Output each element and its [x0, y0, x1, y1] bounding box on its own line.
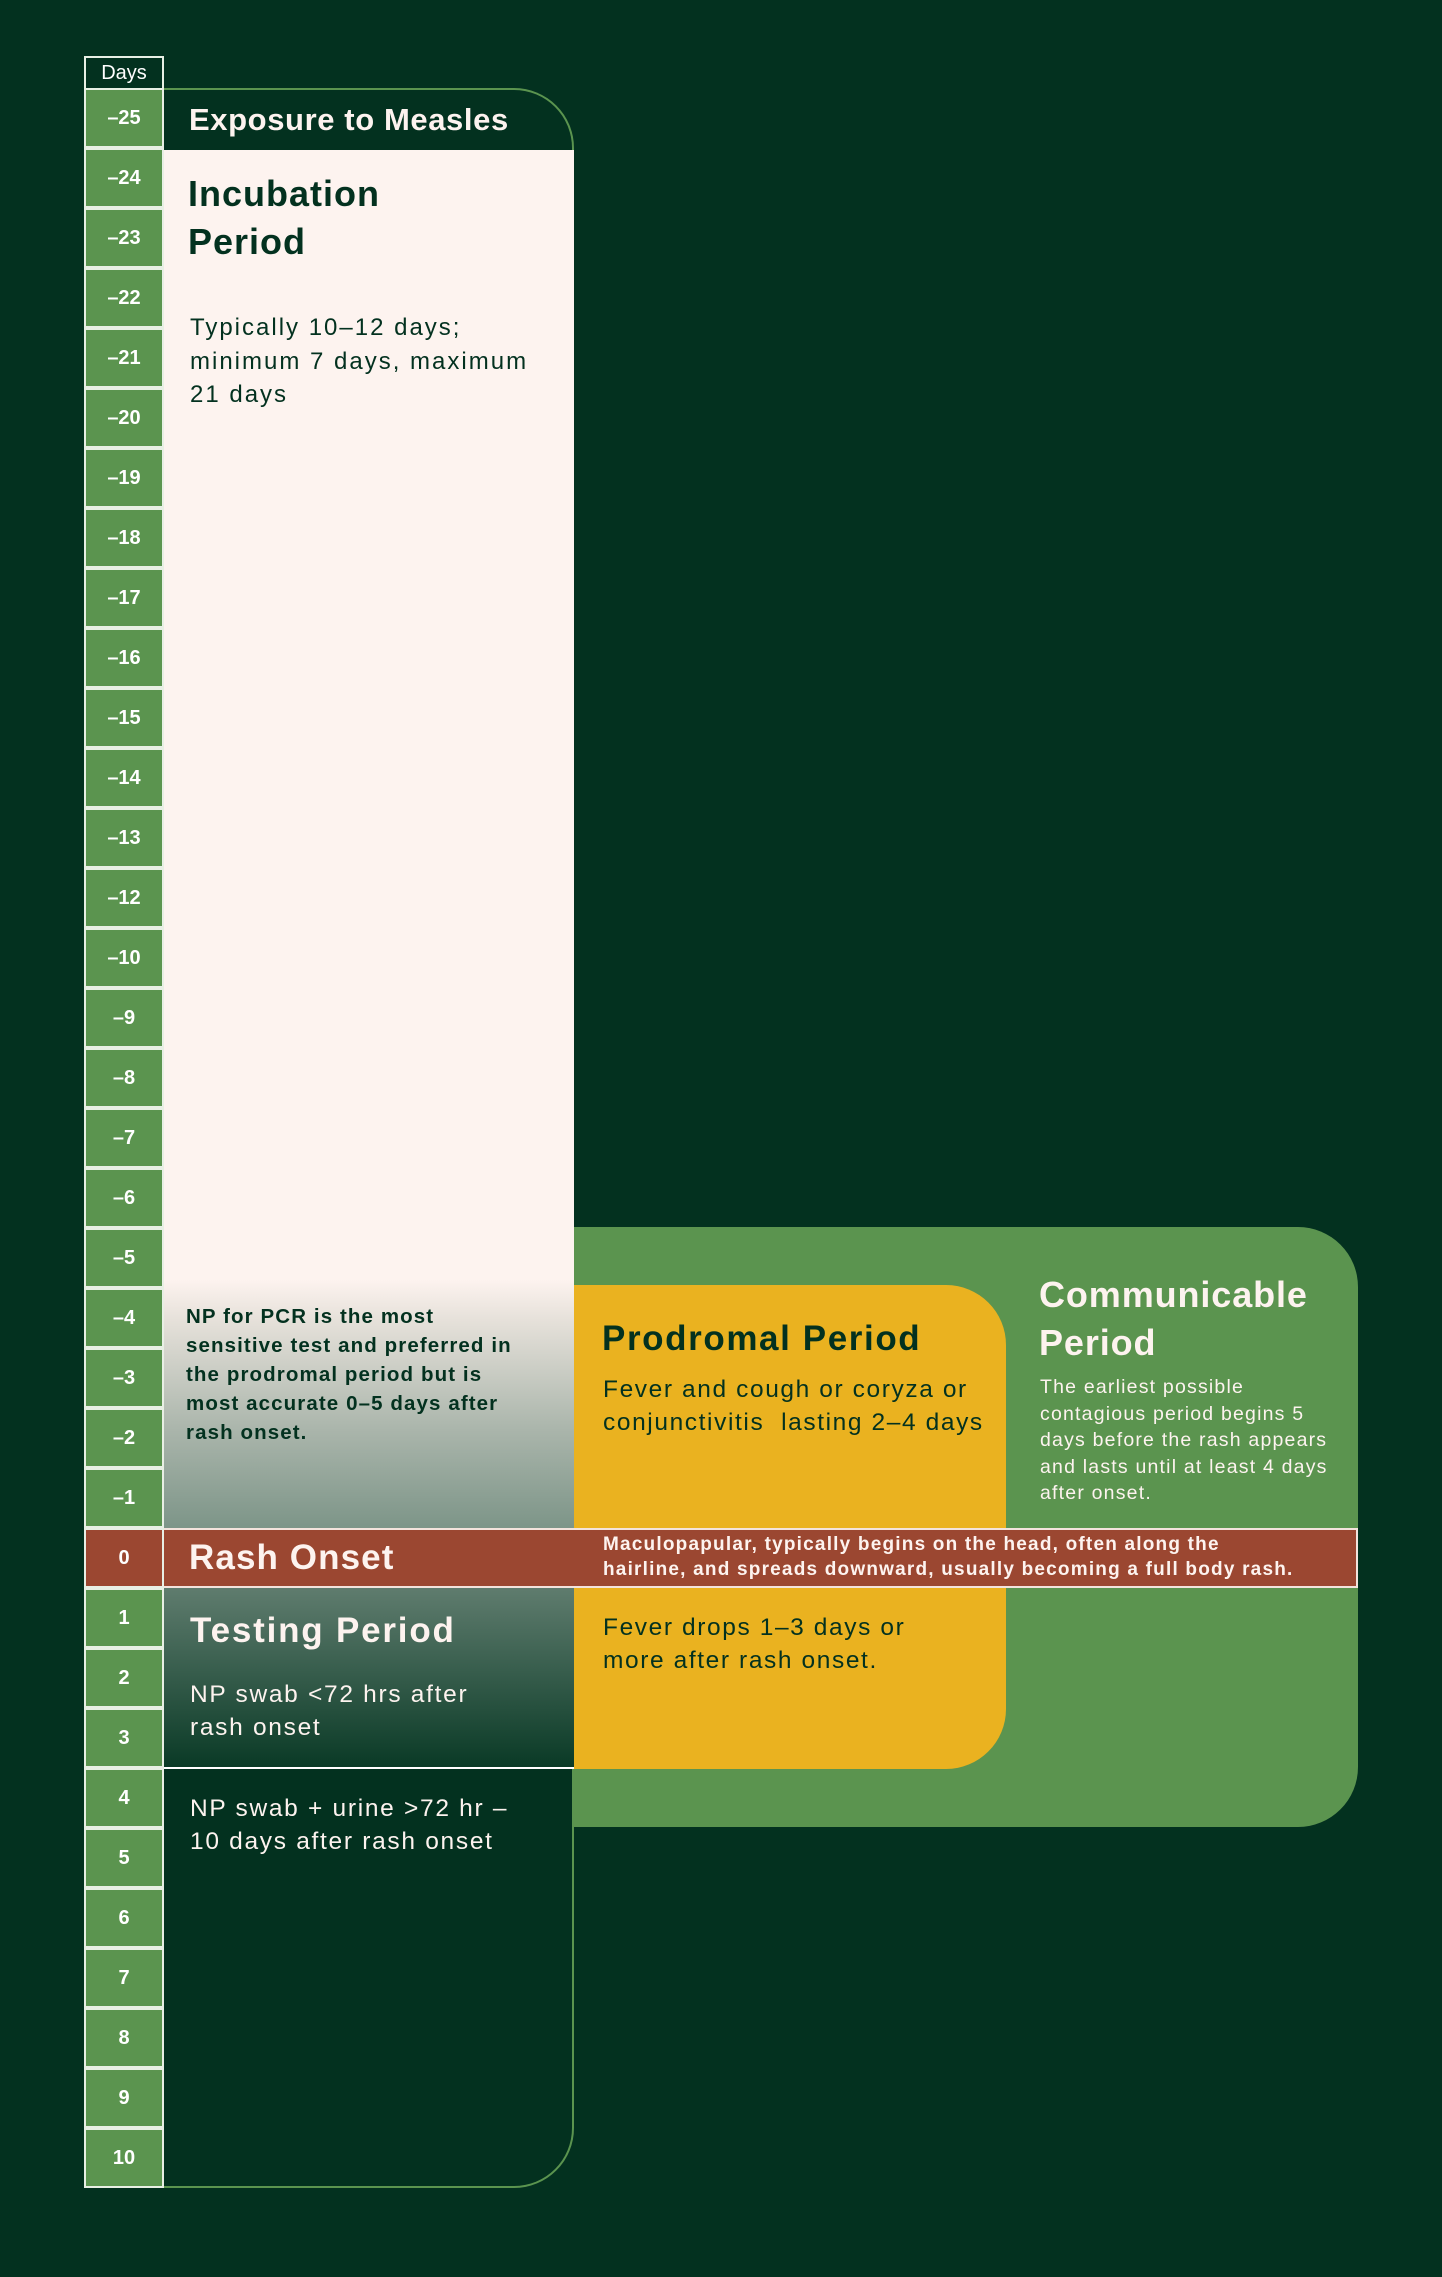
text: –21	[107, 346, 141, 368]
heading: incubation period: Incubation	[188, 173, 380, 214]
text: –1	[113, 1486, 135, 1508]
text: –22	[107, 286, 141, 308]
heading: incubation period	[188, 173, 380, 262]
text: 9	[118, 2086, 130, 2108]
text: prodromal description: conjunctivitis lasting 2–4 days	[603, 1409, 984, 1436]
text: communicable description: days before the rash appears	[1040, 1429, 1327, 1451]
text: 5	[118, 1846, 130, 1868]
text: –16	[107, 646, 141, 668]
text: –7	[113, 1126, 135, 1148]
text: 2	[118, 1666, 130, 1688]
text: prodromal description	[603, 1376, 984, 1436]
text: incubation description: Typically 10–12 days;	[190, 314, 461, 341]
text: –20	[107, 406, 141, 428]
text: incubation description: 21 days	[190, 381, 288, 408]
text: NP for PCR note: most accurate 0–5 days after	[186, 1392, 498, 1415]
text: 1	[118, 1606, 130, 1628]
text: NP for PCR note: rash onset.	[186, 1421, 307, 1444]
text: NP for PCR note: sensitive test and preferred in	[186, 1334, 512, 1357]
text: rash description	[603, 1534, 1294, 1580]
text: 4	[118, 1786, 130, 1808]
text: –19	[107, 466, 141, 488]
heading: testing period: Testing Period	[190, 1611, 456, 1650]
text: prodromal description: Fever and cough or coryza or	[603, 1376, 968, 1403]
text: communicable description: after onset.	[1040, 1482, 1152, 1504]
text: 7	[118, 1966, 130, 1988]
heading: rash onset: Rash Onset	[189, 1538, 394, 1577]
text: NP swab plus urine: 10 days after rash onset	[190, 1828, 494, 1855]
heading: communicable period	[1039, 1274, 1308, 1363]
text: –15	[107, 706, 141, 728]
heading: communicable period: Communicable	[1039, 1274, 1308, 1315]
text: incubation description: minimum 7 days, maximum	[190, 348, 528, 374]
text: fever drops	[603, 1614, 905, 1674]
text: rash description: hairline, and spreads downward, usually becoming a full body rash.	[603, 1559, 1294, 1580]
text: NP swab under 72 hrs	[190, 1681, 468, 1741]
text: 6	[118, 1906, 130, 1928]
text: –6	[113, 1186, 135, 1208]
text: fever drops: Fever drops 1–3 days or	[603, 1614, 905, 1641]
text: –4	[113, 1306, 135, 1328]
panel: incubation period	[164, 150, 574, 1528]
text: –17	[107, 586, 141, 608]
heading: communicable period: Period	[1039, 1322, 1156, 1363]
text: –14	[107, 766, 141, 788]
heading: incubation period: Period	[188, 221, 306, 262]
text: NP swab plus urine	[190, 1795, 508, 1855]
text: fever drops: more after rash onset.	[603, 1647, 878, 1674]
heading: prodromal period: Prodromal Period	[602, 1319, 921, 1358]
text: NP for PCR note: the prodromal period but is	[186, 1363, 482, 1386]
text: 0	[118, 1546, 130, 1568]
text: communicable description: The earliest possible	[1040, 1376, 1244, 1398]
text: –9	[113, 1006, 135, 1028]
text: 10	[113, 2146, 135, 2168]
text: NP for PCR note: NP for PCR is the most	[186, 1305, 434, 1328]
panel: prodromal period	[574, 1285, 1006, 1769]
panel: testing period	[164, 1588, 574, 1769]
text: NP swab plus urine: NP swab + urine >72 hr –	[190, 1795, 508, 1822]
text: –13	[107, 826, 141, 848]
text: –23	[107, 226, 141, 248]
text: –24	[107, 166, 141, 188]
text: NP swab under 72 hrs: rash onset	[190, 1714, 321, 1741]
text: communicable description: and lasts until at least 4 days	[1040, 1456, 1328, 1478]
text: incubation description	[190, 314, 528, 408]
text: rash description: Maculopapular, typically begins on the head, often along the	[603, 1534, 1220, 1555]
text: –3	[113, 1366, 135, 1388]
heading: exposure to measles: Exposure to Measles	[189, 102, 509, 137]
text: NP for PCR note	[186, 1305, 512, 1444]
text: –8	[113, 1066, 135, 1088]
text: –18	[107, 526, 141, 548]
text: communicable description	[1040, 1376, 1328, 1504]
label: days header	[84, 56, 164, 90]
text: –10	[107, 946, 141, 968]
text: –2	[113, 1426, 135, 1448]
text: –5	[113, 1246, 135, 1268]
text: communicable description: contagious period begins 5	[1040, 1402, 1304, 1424]
text: –12	[107, 886, 141, 908]
text: NP swab under 72 hrs: NP swab <72 hrs after	[190, 1681, 468, 1708]
text: 3	[118, 1726, 130, 1748]
panel: main column outline	[164, 88, 574, 2188]
label: days header: Days	[101, 62, 147, 84]
panel: communicable period background	[574, 1227, 1358, 1827]
text: –25	[107, 106, 141, 128]
panel: rash onset band	[84, 1528, 1358, 1588]
text: 8	[118, 2026, 130, 2048]
